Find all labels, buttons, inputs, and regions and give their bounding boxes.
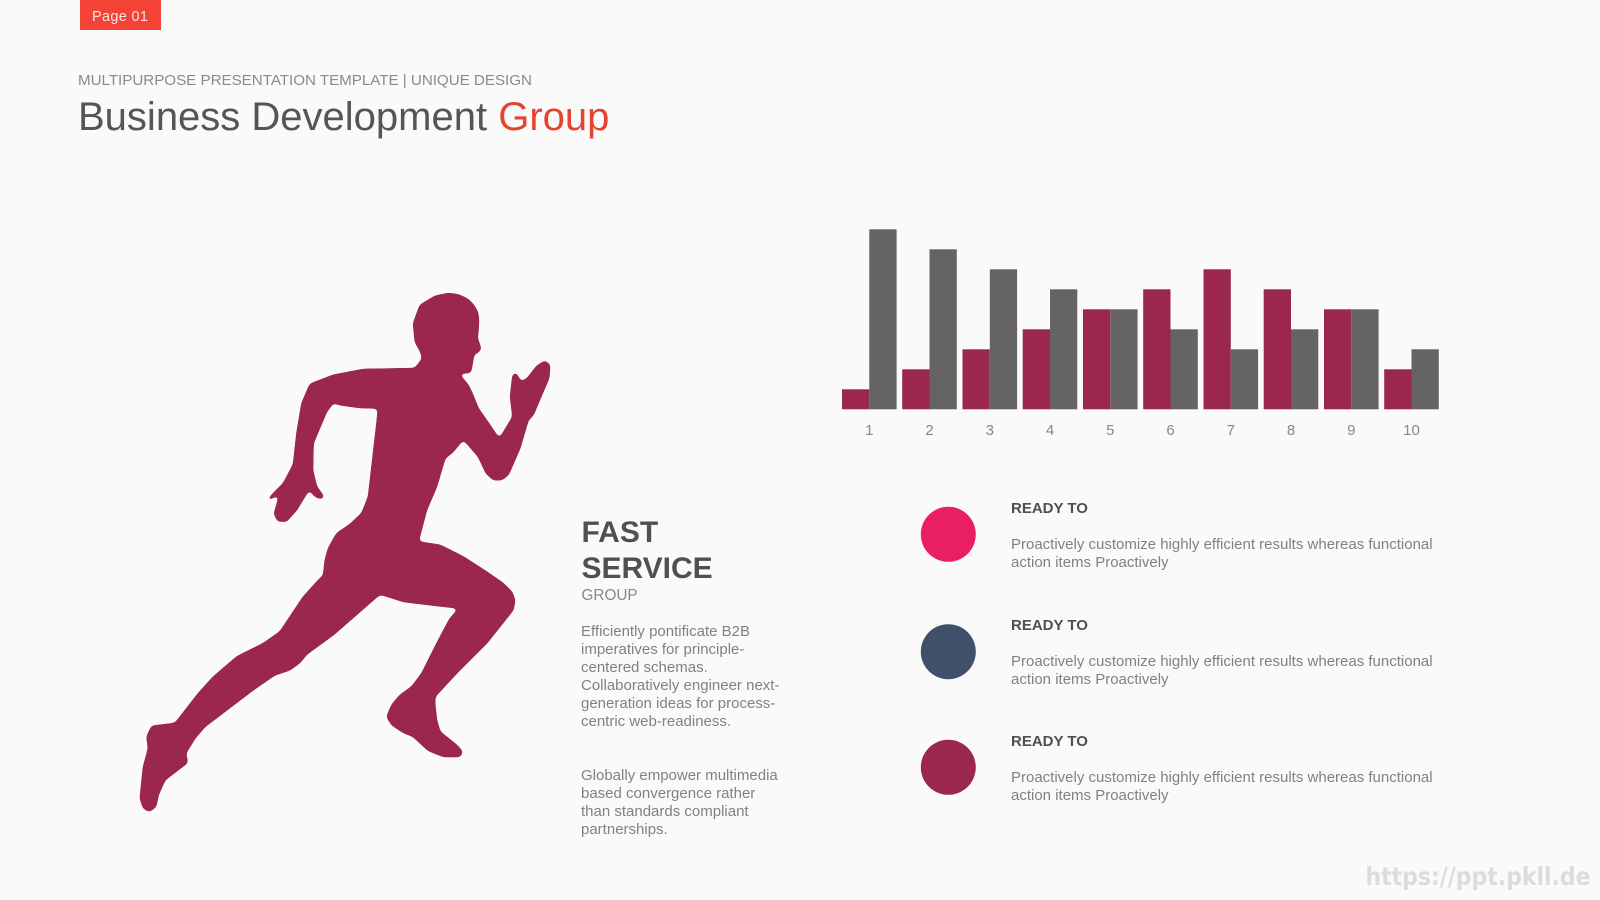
heading: fast service: FAST [582, 516, 658, 549]
axis labels: 9 [1347, 422, 1355, 439]
red series bars [842, 269, 1412, 409]
title: Business Development Group [78, 95, 609, 139]
text block: globally empower [581, 767, 778, 838]
axis labels: 2 [925, 422, 934, 439]
icon: crimson circle [921, 740, 976, 795]
axis labels: 1 [865, 422, 873, 439]
item 2 text [1011, 653, 1433, 688]
text block: globally empower: Globally empower multimedia [581, 767, 778, 784]
item 3 text: Proactively customize highly efficient results whereas functional [1011, 769, 1433, 786]
text block: efficiently pontificate: Efficiently pontificate B2B [581, 623, 750, 640]
heading: fast service: GROUP [582, 587, 638, 604]
axis labels: 8 [1287, 422, 1295, 439]
item 3 text [1011, 769, 1433, 804]
heading: fast service: SERVICE [582, 552, 713, 585]
item 3 heading: READY TO [1011, 733, 1088, 750]
bar chart [842, 229, 1439, 439]
subtitle: MULTIPURPOSE PRESENTATION TEMPLATE | UNIQUE DESIGN [78, 72, 532, 89]
list item 3 [921, 733, 1433, 804]
text block: globally empower: partnerships. [581, 821, 668, 838]
axis labels: 5 [1106, 422, 1114, 439]
item 2 text: action items Proactively [1011, 671, 1169, 688]
icon: running man silhouette [140, 293, 550, 812]
item 1 text: Proactively customize highly efficient results whereas functional [1011, 536, 1433, 553]
page tag [80, 0, 161, 30]
icon: navy circle [921, 624, 976, 679]
axis labels: 7 [1227, 422, 1235, 439]
axis labels: 4 [1046, 422, 1054, 439]
icon: pink circle [921, 507, 976, 562]
item 2 text: Proactively customize highly efficient results whereas functional [1011, 653, 1433, 670]
text block: globally empower: than standards compliant [581, 803, 749, 820]
text block: efficiently pontificate: Collaboratively engineer next- [581, 677, 779, 694]
text block: efficiently pontificate: imperatives for principle- [581, 641, 744, 658]
item 1 heading: READY TO [1011, 500, 1088, 517]
list item 2 [921, 617, 1433, 688]
list item 1 [921, 500, 1433, 571]
text block: efficiently pontificate: centered schemas. [581, 659, 708, 676]
item 1 text [1011, 536, 1433, 571]
page tag: Page 01 [92, 9, 148, 25]
axis labels: 3 [986, 422, 994, 439]
axis labels [865, 422, 1420, 439]
gray series bars [869, 229, 1439, 409]
item 3 text: action items Proactively [1011, 787, 1169, 804]
item 2 heading: READY TO [1011, 617, 1088, 634]
text block: efficiently pontificate: generation ideas for process- [581, 695, 775, 712]
axis labels: 6 [1166, 422, 1175, 439]
heading: fast service [582, 516, 713, 604]
axis labels: 10 [1403, 422, 1420, 439]
item 1 text: action items Proactively [1011, 554, 1169, 571]
text block: efficiently pontificate [581, 623, 779, 730]
text block: globally empower: based convergence rather [581, 785, 755, 802]
text block: efficiently pontificate: centric web-readiness. [581, 713, 731, 730]
